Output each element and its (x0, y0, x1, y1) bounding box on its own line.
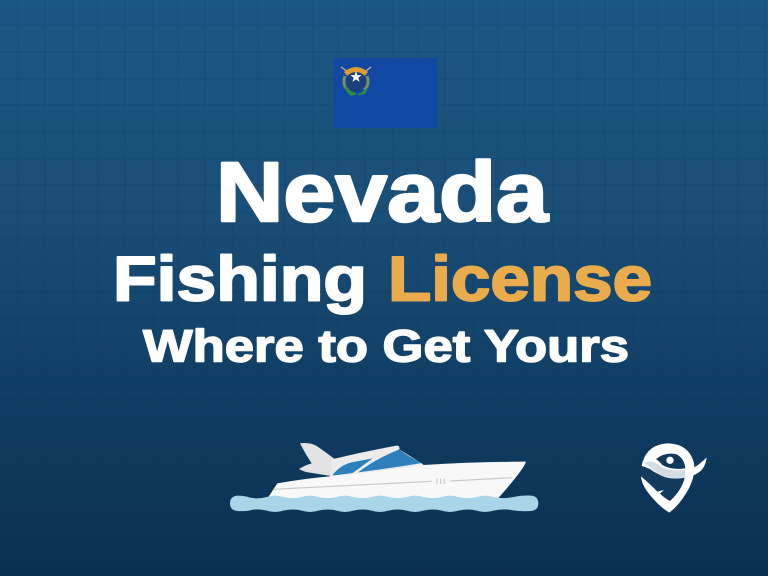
icon: Nevada state flag (334, 58, 437, 128)
waves (230, 495, 538, 512)
heading: License: License (388, 244, 652, 314)
icon: fish logo (639, 443, 707, 513)
boat fin (299, 443, 335, 477)
logo lower cut-out (639, 465, 685, 501)
logo head cut-out (656, 454, 685, 469)
logo eye (666, 457, 674, 464)
heading: Fishing: Fishing (113, 244, 367, 314)
boat windows (332, 449, 422, 475)
logo shield (641, 443, 694, 513)
icon: motor yacht on waves (230, 443, 538, 512)
boat hull (266, 462, 526, 501)
title: Nevada: Nevada (216, 145, 549, 239)
logo tail (685, 457, 707, 478)
hull stripe and vents (273, 478, 512, 489)
boat cabin (330, 446, 427, 477)
subtitle: Where to Get Yours: Where to Get Yours (143, 320, 629, 372)
logo grey fin band (644, 461, 687, 479)
